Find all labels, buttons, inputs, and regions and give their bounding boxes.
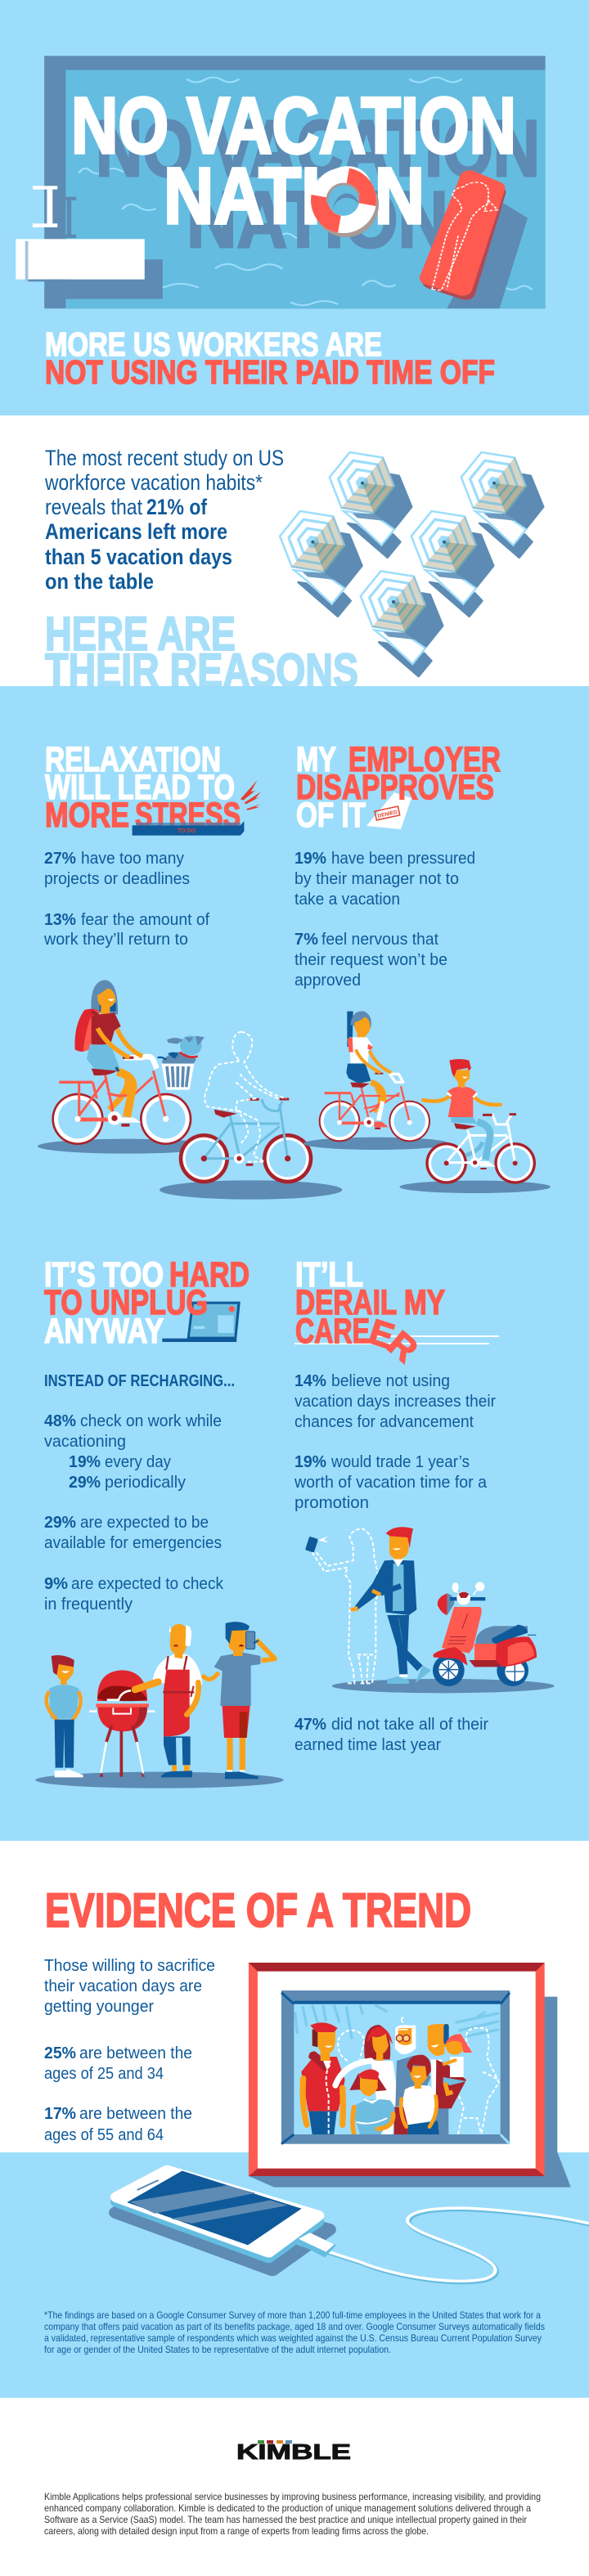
heading: here are their reasons: HERE ARE <box>45 608 236 661</box>
stats: employer: their request won’t be <box>294 951 447 969</box>
intro text: The most recent study on US <box>45 446 284 470</box>
child on shoulder <box>450 2057 464 2077</box>
stats: unplug: check on work while <box>80 1412 222 1430</box>
stats: stress: 13% <box>44 911 76 929</box>
stats: younger workers: 25% <box>44 2044 76 2062</box>
stats: stress: fear the amount of <box>81 911 209 929</box>
man on phone <box>214 1622 275 1779</box>
stats: stress: projects or deadlines <box>44 870 190 888</box>
heading: relaxation will lead to more stress: MORE <box>45 796 129 835</box>
stats: younger workers: their vacation days are <box>44 1977 202 1995</box>
stats: employer <box>294 850 475 990</box>
boy centre <box>402 2085 436 2125</box>
panel: intro study <box>44 446 545 698</box>
intro text: on the table <box>45 569 154 594</box>
stats: younger workers: Those willing to sacrifice <box>44 1957 215 1975</box>
stats: earned time: did not take all of their <box>331 1716 488 1734</box>
girl on bike <box>303 1012 449 1150</box>
stats: stress: have too many <box>81 850 184 868</box>
stats: employer: feel nervous that <box>321 931 438 949</box>
stats: career: vacation days increases their <box>294 1393 496 1411</box>
stats: unplug: 48% <box>44 1412 76 1430</box>
stats: unplug: available for emergencies <box>44 1534 222 1552</box>
stats: employer: approved <box>294 972 361 990</box>
illustration: girl and boy on bikes <box>303 1012 551 1193</box>
stats: unplug: 29% <box>44 1514 76 1532</box>
heading: relaxation will lead to more stress <box>45 740 241 835</box>
about text: enhanced company collaboration. Kimble is dedicated to the production of unique management solutions delivered through a <box>44 2502 531 2514</box>
heading: here are their reasons <box>45 608 358 698</box>
boy <box>47 1655 83 1777</box>
stats: career: promotion <box>294 1494 369 1512</box>
stats: unplug: are expected to check <box>71 1575 224 1593</box>
panel: hero header <box>0 0 589 415</box>
heading: it'll derail my career: CARE <box>295 1312 370 1351</box>
heading: it's too hard to unplug anyway: HARD <box>169 1255 250 1295</box>
icon: to do tray and stress bolts: TO DO <box>178 828 196 834</box>
stats: younger workers: are between the <box>79 2105 192 2123</box>
stats: employer: 7% <box>294 931 318 949</box>
icon: pool ladder and diving board <box>16 186 145 281</box>
stats: career: worth of vacation time for a <box>294 1474 488 1492</box>
stats: unplug: vacationing <box>44 1433 126 1451</box>
about text: careers, along with detailed design input from a range of experts from leading firms across the globe. <box>44 2525 429 2537</box>
heading: my employer disapproves of it <box>296 740 501 835</box>
panel: phone and footnote background <box>0 2152 589 2398</box>
ghost rider on bike <box>160 1032 342 1200</box>
stats: earned time <box>294 1716 488 1754</box>
heading: relaxation will lead to more stress: STRESS <box>135 796 241 835</box>
stats: employer: 19% <box>294 850 326 868</box>
about text: Software as a Service (SaaS) model. The team has harnessed the best practice and unique intellectual property gained in their <box>44 2514 527 2525</box>
icon: smartphone with charging cable <box>116 2171 589 2282</box>
stats: career: 19% <box>294 1453 326 1471</box>
icon: to do tray and stress bolts <box>133 780 261 836</box>
stats: unplug: are expected to be <box>80 1514 209 1532</box>
stats: unplug <box>44 1372 235 1613</box>
logo: Kimble: KIMBLE <box>236 2439 351 2464</box>
footnote: for age or gender of the United States to be representative of the adult internet population. <box>44 2344 391 2355</box>
stats: employer: take a vacation <box>294 891 400 909</box>
title <box>71 81 516 240</box>
heading: it'll derail my career: IT’LL <box>295 1255 363 1295</box>
stats: younger workers: 17% <box>44 2105 76 2123</box>
icon: laptop <box>162 1302 241 1342</box>
illustration: man with scooter and selfie ghost <box>305 1527 555 1693</box>
stats: stress <box>43 850 209 949</box>
stats: younger workers: are between the <box>79 2044 192 2062</box>
heading: it'll derail my career: E <box>364 1312 398 1357</box>
stats: unplug: 9% <box>44 1575 68 1593</box>
title shadow: NATION <box>187 175 448 264</box>
stats: unplug: every day <box>105 1453 171 1471</box>
subtitle <box>45 325 495 391</box>
heading: it's too hard to unplug anyway: TO UNPLUG <box>44 1283 208 1322</box>
subtitle: MORE US WORKERS ARE <box>45 325 382 363</box>
stats: unplug: in frequently <box>44 1595 133 1613</box>
stats: younger workers: getting younger <box>44 1998 154 2016</box>
heading: it'll derail my career <box>294 1255 499 1371</box>
heading: my employer disapproves of it: MY <box>296 740 336 779</box>
intro text: workforce vacation habits* <box>44 470 263 495</box>
stats: earned time: 47% <box>294 1716 326 1734</box>
heading: EVIDENCE OF A TREND <box>45 1884 471 1937</box>
stats: career: would trade 1 year’s <box>330 1453 470 1471</box>
panel: evidence of a trend <box>44 1884 471 2144</box>
heading: it'll derail my career: DERAIL MY <box>295 1283 445 1322</box>
heading: relaxation will lead to more stress: RELAXATION <box>45 740 221 779</box>
illustration: woman and ghost on bikes <box>38 980 342 1200</box>
title: NATION <box>164 151 425 240</box>
grill <box>89 1670 155 1777</box>
icon: beach umbrellas <box>279 451 545 676</box>
stats: younger workers: ages of 55 and 64 <box>44 2126 164 2144</box>
stats: stress: work they’ll return to <box>43 931 188 949</box>
stats: earned time: earned time last year <box>294 1736 441 1754</box>
icon: life ring <box>315 173 377 236</box>
heading: my employer disapproves of it: DENIED <box>377 810 398 819</box>
stats: career: believe not using <box>331 1372 450 1390</box>
stats: employer: by their manager not to <box>294 870 459 888</box>
heading: my employer disapproves of it: EMPLOYER <box>348 740 501 779</box>
intro text: reveals that <box>45 495 142 519</box>
heading: it's too hard to unplug anyway: ANYWAY <box>44 1312 164 1351</box>
icon: pool float with dashed body outline <box>429 177 497 293</box>
stats: career: chances for advancement <box>294 1413 474 1431</box>
pool illustration <box>44 56 546 308</box>
heading: it's too hard to unplug anyway <box>44 1255 250 1351</box>
footnote <box>44 2309 545 2355</box>
father left <box>301 2057 345 2112</box>
stats: unplug: 29% <box>69 1474 101 1492</box>
woman on bike with dog <box>38 980 216 1154</box>
stats: younger workers: ages of 25 and 34 <box>44 2065 164 2083</box>
intro text <box>44 446 284 594</box>
stats: younger workers <box>44 1957 215 2144</box>
heading: it's too hard to unplug anyway: IT’S TOO <box>44 1255 164 1295</box>
intro text: than 5 vacation days <box>45 545 232 569</box>
ghost selfie <box>305 1528 379 1683</box>
ghost figures <box>338 2028 499 2134</box>
about text <box>44 2491 541 2537</box>
heading: it'll derail my career: R <box>380 1324 425 1371</box>
stats: unplug: 19% <box>69 1453 101 1471</box>
illustration: family barbecue <box>35 1622 284 1788</box>
illustration: family portrait <box>281 1990 510 2144</box>
stats: career <box>294 1372 496 1512</box>
about text: Kimble Applications helps professional service businesses by improving business performance, increasing visibility, and providing <box>44 2491 541 2502</box>
heading: here are their reasons: THEIR REASONS <box>45 644 358 698</box>
man <box>349 1527 431 1684</box>
palm leaves <box>295 2005 499 2039</box>
grandfather <box>395 2055 431 2107</box>
scooter <box>433 1582 537 1686</box>
heading: my employer disapproves of it: OF IT <box>296 796 366 835</box>
boy on bike <box>399 1059 551 1193</box>
title shadow <box>96 104 540 264</box>
illustration: red picture frame <box>249 1963 571 2188</box>
heading: relaxation will lead to more stress: WILL LEAD TO <box>45 768 235 807</box>
dad in apron <box>135 1624 218 1777</box>
stats: unplug: periodically <box>105 1474 186 1492</box>
intro text: Americans left more <box>45 519 227 544</box>
girl <box>349 2073 387 2091</box>
mother <box>364 2025 390 2059</box>
subtitle: NOT USING THEIR PAID TIME OFF <box>45 353 495 391</box>
father right <box>435 2108 448 2134</box>
heading: my employer disapproves of it: DISAPPROVES <box>296 768 494 807</box>
stats: stress: 27% <box>44 850 76 868</box>
panel: reasons <box>0 686 589 1841</box>
stats: career: 14% <box>294 1372 326 1390</box>
stats: unplug: INSTEAD OF RECHARGING... <box>44 1372 235 1390</box>
intro text: 21% of <box>146 495 208 519</box>
stats: employer: have been pressured <box>331 850 475 868</box>
